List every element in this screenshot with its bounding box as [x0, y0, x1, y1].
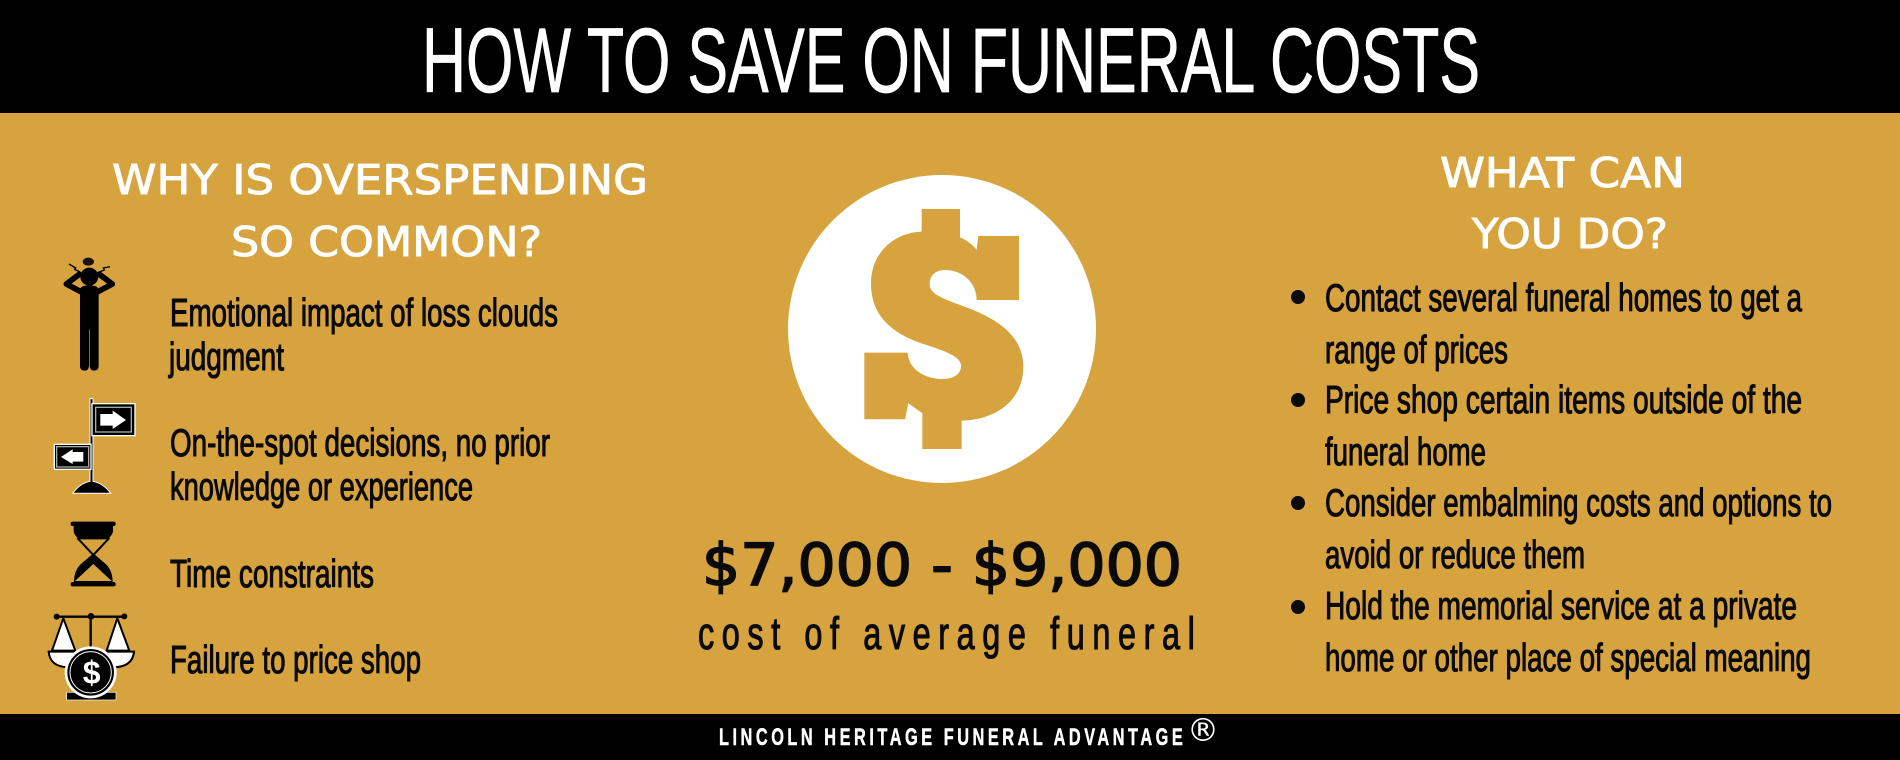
heading: what can you do	[1440, 149, 1685, 258]
icon: large dollar sign in white circle	[788, 175, 1096, 483]
bullet: memorial service	[1291, 585, 1811, 680]
text: on-the-spot decisions: On-the-spot decisions, no prior	[170, 422, 550, 465]
heading: why is overspending so common	[112, 156, 648, 266]
icon: hourglass	[71, 522, 116, 586]
panel: what can you do	[1291, 149, 1832, 680]
icon: direction signpost	[54, 399, 135, 493]
panel: why is overspending so common	[49, 156, 648, 700]
registered mark: ®	[1187, 711, 1219, 749]
text: cost of average funeral: cost of average funeral	[698, 610, 1195, 659]
heading: what can you do: WHAT CAN	[1440, 149, 1685, 197]
heading: why is overspending so common: SO COMMON?	[231, 218, 542, 266]
text: emotional impact	[168, 292, 558, 379]
text: failure to price shop: Failure to price shop	[170, 639, 421, 682]
text: on-the-spot decisions	[170, 422, 550, 509]
bullet: price shop items: funeral home	[1325, 431, 1486, 474]
icon: balance scale with dollar coin: $	[83, 654, 101, 690]
bullet: embalming costs	[1291, 482, 1832, 577]
text: emotional impact: Emotional impact of loss clouds	[170, 292, 558, 335]
footer band	[0, 711, 1900, 760]
header band with title	[0, 0, 1900, 113]
text: cost range: $7,000 - $9,000	[702, 531, 1182, 599]
icon: stressed person holding head	[66, 258, 112, 371]
heading: what can you do: YOU DO?	[1471, 210, 1668, 258]
bullet: price shop items	[1291, 379, 1802, 474]
text: emotional impact: judgment	[168, 336, 284, 379]
bullet: contact funeral homes	[1291, 277, 1802, 372]
bullet list of actions	[1291, 277, 1832, 680]
bullet: embalming costs: avoid or reduce them	[1325, 534, 1585, 577]
panel: central cost figure	[698, 175, 1195, 659]
text: time constraints: Time constraints	[170, 553, 374, 596]
text: on-the-spot decisions: knowledge or experience	[170, 466, 473, 509]
bullet: contact funeral homes: range of prices	[1325, 329, 1508, 372]
heading: why is overspending so common: WHY IS OVERSPENDING	[112, 156, 648, 204]
icon: balance scale with dollar coin	[49, 613, 134, 700]
footer brand text: LINCOLN HERITAGE FUNERAL ADVANTAGE	[719, 724, 1183, 751]
